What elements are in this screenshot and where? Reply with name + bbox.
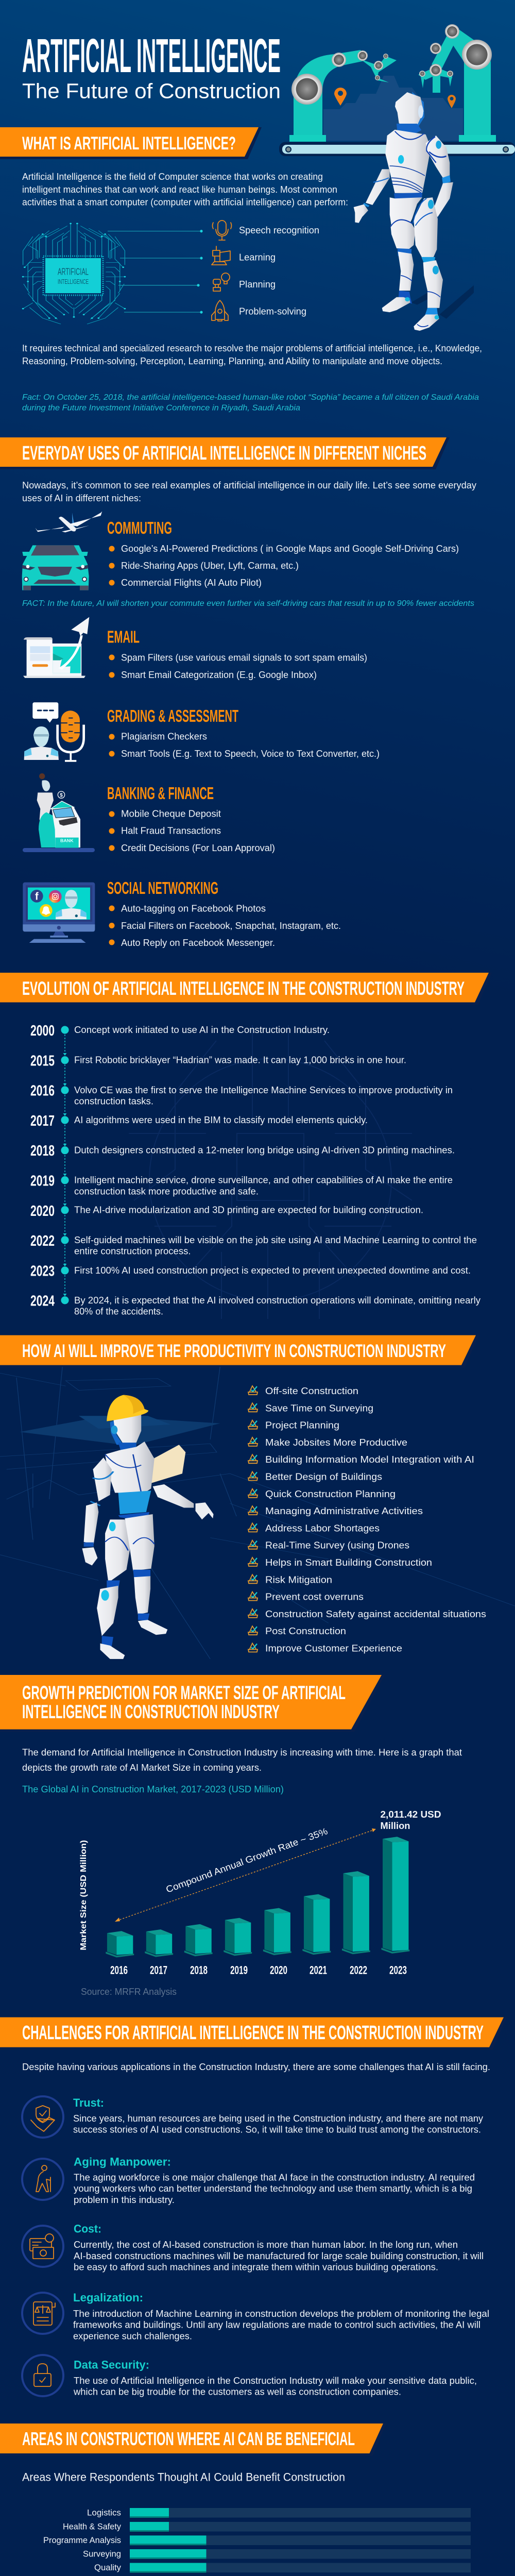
timeline 2020 bbox=[30, 1203, 423, 1219]
timeline 2020: 2020 bbox=[30, 1203, 55, 1219]
challenge: legalization: experience such challenges. bbox=[73, 2331, 192, 2341]
challenge: cost: Currently, the cost of AI-based construction is more than human labor. In the long run, when bbox=[74, 2240, 458, 2250]
improvement 15: Post Construction bbox=[265, 1626, 346, 1636]
timeline 2017: 2017 bbox=[30, 1113, 55, 1129]
horizontal bar chart: number of mentions: Programme Analysis bbox=[43, 2535, 121, 2545]
timeline 2023 bbox=[30, 1263, 471, 1279]
AI brain circuit bbox=[22, 223, 126, 324]
block: email: Smart Email Categorization (E.g. Google Inbox) bbox=[121, 670, 317, 680]
block: social networking bbox=[107, 878, 341, 948]
bar chart: market size: 2023 bbox=[389, 1964, 407, 1977]
improvement 4: Make Jobsites More Productive bbox=[265, 1437, 407, 1448]
improvement 13: Prevent cost overruns bbox=[265, 1592, 364, 1602]
block: grading: Plagiarism Checkers bbox=[121, 732, 207, 742]
block: commuting: Commercial Flights (AI Auto Pilot) bbox=[121, 578, 262, 588]
bar chart: market size: 2017 bbox=[150, 1964, 167, 1977]
block: banking: Mobile Cheque Deposit bbox=[121, 809, 221, 819]
challenge: cost: AI-based constructions machines will be manufactured for large scale building construction, it will bbox=[74, 2251, 484, 2261]
challenge: legalization: frameworks and buildings. Until any law regulations are made to control such activities, the AI will bbox=[73, 2320, 480, 2330]
bar chart: market size: 2,011.42 USD bbox=[380, 1809, 441, 1820]
timeline 2016 bbox=[30, 1083, 453, 1107]
bar chart: market size: 2019 bbox=[230, 1964, 248, 1977]
horizontal bar chart: number of mentions: Surveying bbox=[83, 2549, 121, 2559]
banner: everyday uses bbox=[0, 437, 450, 469]
growth intro: The demand for Artificial Intelligence in Construction Industry is increasing with time. Here is a graph that bbox=[22, 1748, 462, 1758]
main robot illustration bbox=[354, 92, 474, 331]
timeline 2022 bbox=[30, 1233, 477, 1257]
icon: bank robot kiosk: $ bbox=[60, 793, 63, 799]
icon: bank robot kiosk bbox=[23, 773, 95, 852]
challenge: cost: be easy to afford such machines and integrate them within various building operations. bbox=[74, 2262, 438, 2273]
challenge: data security: Data Security: bbox=[74, 2359, 149, 2371]
timeline 2024: 2024 bbox=[30, 1293, 55, 1310]
block: banking: Credit Decisions (For Loan Approval) bbox=[121, 843, 275, 853]
block: social networking: Facial Filters on Facebook, Snapchat, Instagram, etc. bbox=[121, 921, 341, 931]
timeline 2023: 2023 bbox=[30, 1263, 55, 1279]
challenge: cost: Cost: bbox=[74, 2222, 101, 2235]
timeline 2019: 2019 bbox=[30, 1173, 55, 1189]
improvement 8: Managing Administrative Activities bbox=[265, 1506, 423, 1516]
challenge: data security: which can be big trouble for the customers as well as construction companies. bbox=[73, 2387, 401, 2397]
block: grading bbox=[107, 706, 380, 759]
intro text: intelligent machines that can work and react like human beings. Most common bbox=[22, 184, 337, 195]
bar chart: market size: 2022 bbox=[350, 1964, 367, 1977]
block: grading: GRADING & ASSESSMENT bbox=[107, 706, 238, 725]
timeline 2019: construction task more productive and safe. bbox=[74, 1186, 259, 1196]
challenge: legalization bbox=[22, 2291, 489, 2341]
timeline 2022: 2022 bbox=[30, 1233, 55, 1249]
improvement 10: Real-Time Survey (using Drones bbox=[265, 1540, 409, 1551]
timeline 2022: Self-guided machines will be visible on the job site using AI and Machine Learning to control the bbox=[74, 1235, 477, 1245]
improvement 9: Address Labor Shortages bbox=[265, 1523, 380, 1533]
improvement 12: Risk Mitigation bbox=[265, 1574, 332, 1585]
improvement 1: Off-site Construction bbox=[265, 1386, 358, 1396]
challenge: data security bbox=[22, 2355, 477, 2397]
improvement 5: Building Information Model Integration with AI bbox=[265, 1454, 474, 1465]
timeline 2018: Dutch designers constructed a 12-meter long bridge using AI-driven 3D printing machines. bbox=[74, 1145, 455, 1156]
fact: Sophia: during the Future Investment Initiative Conference in Riyadh, Saudi Arabia bbox=[22, 404, 300, 412]
research paragraph: Reasoning, Problem-solving, Perception, Learning, Planning, and Ability to manipulate and move objects. bbox=[22, 356, 442, 366]
icon: email laptop bbox=[23, 617, 89, 678]
block: social networking: SOCIAL NETWORKING bbox=[107, 878, 218, 897]
intro text: Artificial Intelligence is the field of Computer science that works on creating bbox=[22, 172, 323, 182]
bar chart: market size: Million bbox=[380, 1821, 410, 1831]
improvement 14: Construction Safety against accidental situations bbox=[265, 1609, 486, 1619]
chart source: Source: MRFR Analysis bbox=[81, 1987, 177, 1997]
timeline 2019 bbox=[30, 1173, 453, 1196]
fact: commute: FACT: In the future, AI will shorten your commute even further via self-driving cars that result in up to 90% fewer accidents bbox=[22, 599, 474, 608]
bar chart: market size: 2018 bbox=[190, 1964, 208, 1977]
horizontal bar chart: number of mentions: Logistics bbox=[87, 2508, 121, 2517]
challenges intro: Despite having various applications in the Construction Industry, there are some challenges that AI is still facing. bbox=[22, 2062, 490, 2072]
block: commuting bbox=[107, 518, 459, 588]
bar chart: market size: Market Size (USD Million) bbox=[79, 1840, 88, 1951]
challenge: legalization: Legalization: bbox=[73, 2291, 143, 2304]
block: banking: Halt Fraud Transactions bbox=[121, 826, 221, 836]
icon: monitor with social apps: f bbox=[35, 891, 39, 903]
block: banking: BANKING & FINANCE bbox=[107, 784, 214, 803]
block: grading: Smart Tools (E.g. Text to Speech, Voice to Text Converter, etc.) bbox=[121, 749, 380, 759]
horizontal bar chart: number of mentions: Quality bbox=[94, 2563, 121, 2572]
title bbox=[22, 29, 281, 103]
icon: robot and microphone bbox=[24, 702, 84, 761]
challenge: legalization: The introduction of Machine Learning in construction develops the problem of monitoring the legal bbox=[73, 2309, 489, 2319]
title: The Future of Construction bbox=[22, 79, 281, 103]
improvement 16: Improve Customer Experience bbox=[265, 1643, 402, 1654]
banner: evolution bbox=[0, 973, 492, 1005]
timeline 2015 bbox=[30, 1053, 406, 1069]
block: social networking: Auto-tagging on Facebook Photos bbox=[121, 904, 266, 914]
timeline 2015: 2015 bbox=[30, 1053, 55, 1069]
conveyor belt bbox=[279, 142, 515, 156]
bar chart: market size: 2020 bbox=[270, 1964, 287, 1977]
block: email: Spam Filters (use various email signals to sort spam emails) bbox=[121, 652, 367, 663]
icon: plane and car bbox=[22, 511, 102, 590]
challenge: cost bbox=[22, 2222, 484, 2273]
activity: problem-solving bbox=[212, 300, 306, 321]
activity: learning: Learning bbox=[239, 252, 276, 263]
AI brain circuit: INTELLIGENCE bbox=[58, 278, 89, 285]
timeline 2017: AI algorithms were used in the BIM to classify model elements quickly. bbox=[74, 1115, 368, 1125]
timeline 2016: Volvo CE was the first to serve the Intelligence Machine Services to improve productivity in bbox=[74, 1085, 453, 1095]
timeline 2015: First Robotic bricklayer “Hadrian” was made. It can lay 1,000 bricks in one hour. bbox=[74, 1055, 406, 1065]
everyday uses intro bbox=[22, 480, 476, 503]
block: commuting: Ride-Sharing Apps (Uber, Lyft, Carma, etc.) bbox=[121, 561, 299, 571]
hero illustration: factory arms and city bbox=[289, 24, 496, 142]
challenge: aging manpower: The aging workforce is one major challenge that AI face in the construction industry. AI required bbox=[74, 2172, 475, 2182]
banner: what is AI bbox=[0, 127, 262, 159]
icon: bank robot kiosk: BANK bbox=[60, 838, 74, 843]
chart title: The Global AI in Construction Market, 2017-2023 (USD Million) bbox=[22, 1784, 284, 1794]
challenge: trust: success stories of AI used constructions. So, it will take time to build trust among the constructors. bbox=[73, 2125, 481, 2135]
block: banking bbox=[107, 784, 275, 853]
challenge: data security: The use of Artificial Intelligence in the Construction Industry will make your sensitive data public, bbox=[74, 2376, 477, 2386]
timeline 2023: First 100% AI used construction project is expected to prevent unexpected downtime and cost. bbox=[74, 1265, 471, 1276]
intro text: activities that a smart computer (computer with artificial intelligence) can perform: bbox=[22, 197, 348, 207]
timeline 2000: 2000 bbox=[30, 1023, 55, 1039]
worker robot with blueprint background bbox=[0, 1367, 515, 1659]
everyday uses intro: uses of AI in different niches: bbox=[22, 493, 141, 503]
challenge: aging manpower bbox=[22, 2156, 475, 2205]
challenge: aging manpower: Aging Manpower: bbox=[74, 2156, 171, 2168]
activity: planning bbox=[213, 273, 276, 291]
intro text bbox=[22, 172, 348, 207]
research paragraph bbox=[22, 343, 482, 366]
everyday uses intro: Nowadays, it’s common to see real examples of artificial intelligence in our daily life. Let’s see some everyday bbox=[22, 480, 476, 490]
improvement 3: Project Planning bbox=[265, 1420, 339, 1431]
horizontal bar chart: number of mentions bbox=[43, 2508, 471, 2576]
bar chart: market size: Compound Annual Growth Rate ~ 35% bbox=[164, 1826, 329, 1895]
activity: planning: Planning bbox=[239, 279, 276, 290]
timeline 2018 bbox=[30, 1143, 455, 1159]
block: commuting: COMMUTING bbox=[107, 518, 172, 537]
timeline 2020: The AI-drive modularization and 3D printing are expected for building construction. bbox=[74, 1205, 423, 1215]
timeline connector arrows bbox=[63, 1035, 67, 1296]
timeline 2022: entire construction process. bbox=[74, 1246, 191, 1257]
research paragraph: It requires technical and specialized research to resolve the major problems of artificial intelligence, i.e., Knowledge, bbox=[22, 343, 482, 353]
challenge: aging manpower: problem in this industry. bbox=[74, 2195, 175, 2205]
timeline 2000 bbox=[30, 1023, 330, 1039]
activity: learning bbox=[212, 246, 276, 265]
banner: what is AI: WHAT IS ARTIFICIAL INTELLIGENCE? bbox=[22, 133, 236, 154]
block: email: EMAIL bbox=[107, 628, 140, 646]
bar chart: market size: 2021 bbox=[310, 1964, 327, 1977]
connector lines from brain to activities bbox=[108, 230, 203, 314]
timeline 2024: 80% of the accidents. bbox=[74, 1307, 163, 1317]
areas chart title: Areas Where Respondents Thought AI Could Benefit Construction bbox=[22, 2471, 345, 2484]
challenge: aging manpower: young workers who can better understand the technology and use them smartly, which is a big bbox=[74, 2183, 472, 2194]
icon: monitor with social apps bbox=[23, 883, 95, 943]
bar chart: market size: 2016 bbox=[110, 1964, 128, 1977]
block: email bbox=[107, 628, 367, 680]
banner: growth prediction: INTELLIGENCE IN CONSTRUCTION INDUSTRY bbox=[22, 1701, 280, 1722]
timeline 2016: construction tasks. bbox=[74, 1096, 153, 1107]
bar chart: market size bbox=[79, 1809, 441, 1977]
block: commuting: Google’s AI-Powered Predictions ( in Google Maps and Google Self-Driving Cars) bbox=[121, 544, 459, 554]
growth intro bbox=[22, 1748, 462, 1773]
banner: challenges bbox=[0, 2018, 507, 2050]
timeline 2000: Concept work initiated to use AI in the Construction Industry. bbox=[74, 1025, 330, 1035]
timeline 2016: 2016 bbox=[30, 1083, 55, 1099]
horizontal bar chart: number of mentions: Health & Safety bbox=[63, 2521, 121, 2532]
block: social networking: Auto Reply on Facebook Messenger. bbox=[121, 938, 275, 948]
activity: problem-solving: Problem-solving bbox=[239, 307, 306, 317]
activity: speech recognition bbox=[212, 221, 319, 240]
timeline 2018: 2018 bbox=[30, 1143, 55, 1159]
fact: Sophia bbox=[22, 393, 479, 412]
fact: Sophia: Fact: On October 25, 2018, the artificial intelligence-based human-like robot “Sophia” became a full citizen of Saudi Arabia bbox=[22, 393, 479, 402]
challenge: trust bbox=[22, 2096, 483, 2138]
timeline 2024 bbox=[30, 1293, 480, 1317]
banner: productivity bbox=[0, 1335, 479, 1368]
activity: speech recognition: Speech recognition bbox=[239, 225, 319, 235]
growth intro: depicts the growth rate of AI Market Size in coming years. bbox=[22, 1762, 262, 1773]
improvement 7: Quick Construction Planning bbox=[265, 1489, 396, 1499]
AI brain circuit: ARTIFICIAL bbox=[58, 267, 89, 277]
timeline 2019: Intelligent machine service, drone surveillance, and other capabilities of AI make the entire bbox=[74, 1175, 453, 1185]
timeline 2017 bbox=[30, 1113, 368, 1129]
challenge: trust: Since years, human resources are being used in the Construction industry, and there are not many bbox=[73, 2113, 483, 2124]
improvement 2: Save Time on Surveying bbox=[265, 1403, 373, 1413]
improvement 11: Helps in Smart Building Construction bbox=[265, 1557, 432, 1568]
banner: areas bbox=[0, 2424, 386, 2456]
challenge: trust: Trust: bbox=[73, 2096, 104, 2109]
banner: growth prediction bbox=[0, 1675, 385, 1732]
timeline 2024: By 2024, it is expected that the AI involved construction operations will dominate, omitting nearly bbox=[74, 1295, 480, 1306]
improvement 6: Better Design of Buildings bbox=[265, 1471, 382, 1482]
